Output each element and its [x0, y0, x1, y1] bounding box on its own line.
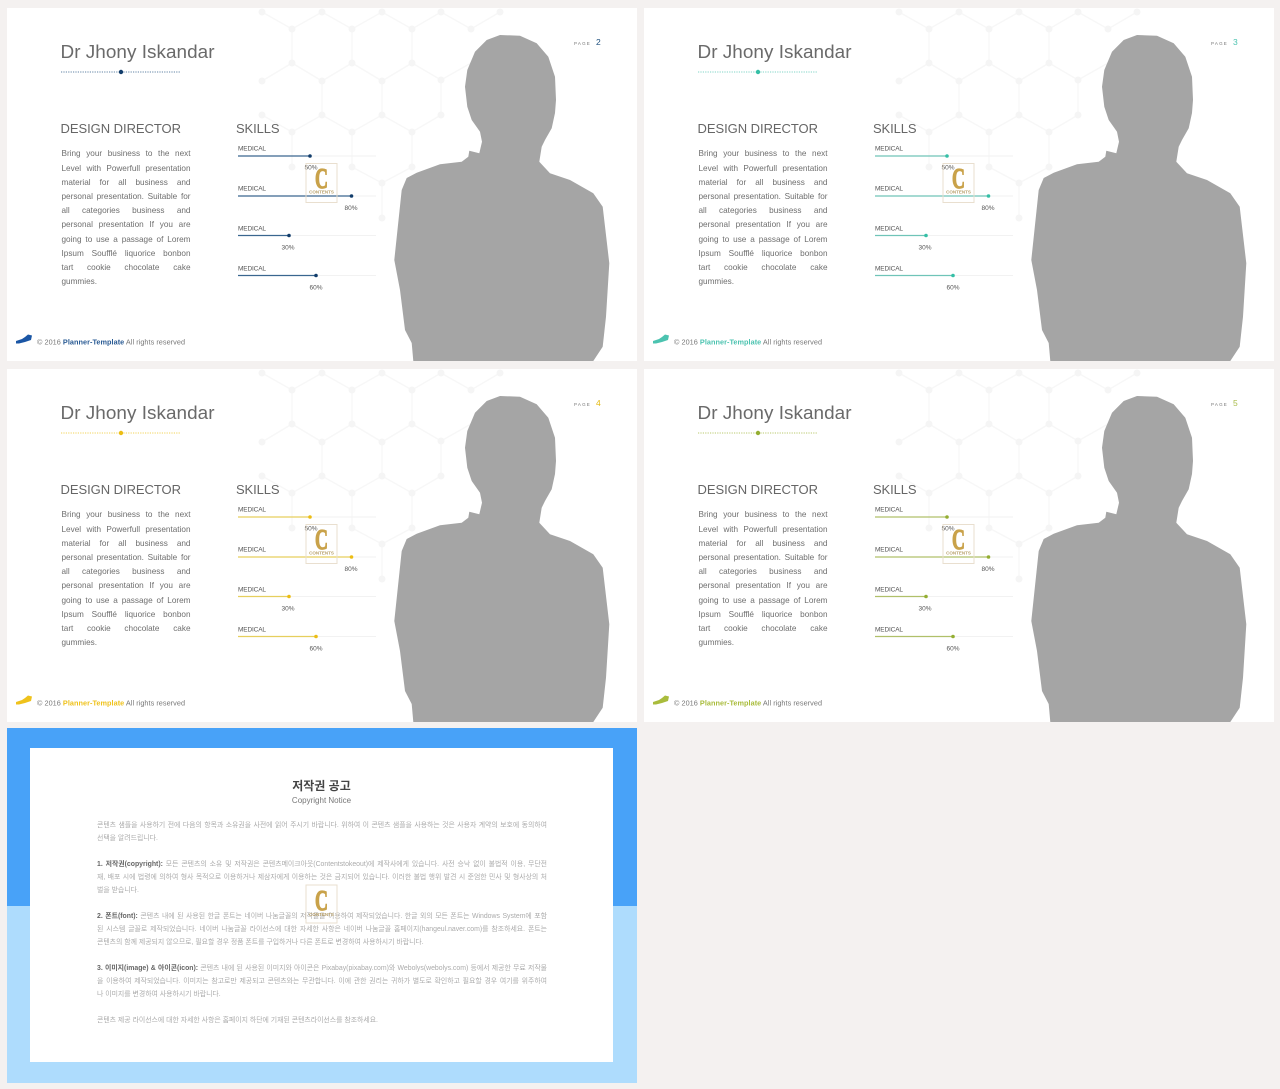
hexagon background pattern — [896, 8, 1140, 222]
body paragraph: Ipsum Soufflé liquorice bonbon — [698, 249, 828, 258]
body paragraph: material for all business and — [62, 539, 190, 548]
page number — [1211, 398, 1238, 408]
body paragraph: personal presentation. Suitable for — [698, 192, 828, 201]
heading: design director: DESIGN DIRECTOR — [60, 121, 181, 136]
skill bar 60%: MEDICAL — [238, 266, 266, 272]
body paragraph: Bring your business to the next — [698, 510, 828, 519]
skill bar 50%: 50% — [304, 526, 318, 532]
body paragraph: Bring your business to the next — [62, 149, 190, 158]
skill bar 30%: MEDICAL — [875, 226, 903, 232]
body paragraph: all categories business and — [62, 567, 190, 576]
panel: slide page 4 yellow — [7, 369, 637, 722]
skill bar 80%: MEDICAL — [238, 186, 266, 192]
icon: shoe logo — [16, 334, 32, 344]
footer copyright: © 2016 Planner-Template All rights reserved — [674, 338, 822, 346]
page number: 4 — [596, 398, 601, 408]
page number — [1211, 37, 1238, 47]
panel: slide page 3 teal — [644, 8, 1274, 361]
skill bar 60%: 60% — [309, 646, 323, 652]
copyright notice text — [97, 821, 547, 1024]
heading: skills: SKILLS — [236, 482, 280, 497]
heading: skills: SKILLS — [873, 482, 917, 497]
body paragraph — [62, 510, 190, 647]
skill bar 80% — [875, 186, 1013, 212]
watermark logo: CONTENTS — [309, 550, 334, 556]
skill bar 50%: MEDICAL — [238, 146, 266, 152]
title: Dr Jhony Iskandar — [60, 42, 214, 63]
skill bar 80%: MEDICAL — [875, 186, 903, 192]
body paragraph: personal presentation. Suitable for — [62, 553, 190, 562]
skill bar 30%: 30% — [918, 244, 932, 252]
body paragraph: Ipsum Soufflé liquorice bonbon — [62, 249, 190, 258]
copyright subheading: Copyright Notice — [292, 796, 351, 805]
watermark logo on notice: CONTENTS — [309, 912, 334, 917]
body paragraph: material for all business and — [698, 539, 828, 548]
skill bar 60%: 60% — [946, 646, 960, 652]
skill bar 50% — [238, 146, 376, 172]
copyright notice text: 을 이용하여 제작되었습니다. 이미지는 참고로만 제공되고 콘텐츠와는 무관합니다. 이에 관한 권리는 귀하가 별도로 확인하고 필요할 경우 여기를 위주하여 — [97, 978, 547, 985]
body paragraph: personal presentation. Suitable for — [698, 553, 828, 562]
body paragraph: Level with Powerfull presentation — [698, 525, 828, 534]
watermark logo on notice — [306, 884, 338, 924]
body paragraph — [698, 149, 828, 286]
copyright notice text: 3. 이미지(image) & 아이콘(icon): 콘텐츠 내에 된 사용된 이미지와 아이콘은 Pixabay(pixabay.com)와 Webolys(webolys.com) 등에서 제공한 무료 저작물 — [97, 965, 547, 972]
skill bar 50%: MEDICAL — [875, 506, 903, 514]
skill bar 30%: 30% — [281, 244, 295, 252]
skill bar 50% — [875, 506, 1013, 532]
watermark logo: CONTENTS — [946, 190, 971, 194]
silhouette portrait — [1031, 396, 1246, 722]
copyright notice text: 2. 폰트(font): 콘텐츠 내에 된 사용된 한글 폰트는 네이버 나눔글꼴의 저작물을 이용하여 제작되었습니다. 한글 외의 모든 폰트는 Windows System에 포함 — [97, 913, 547, 920]
body paragraph: tart cookie chocolate cake — [698, 263, 828, 272]
heading: design director: DESIGN DIRECTOR — [60, 482, 181, 497]
body paragraph: tart cookie chocolate cake — [62, 624, 190, 633]
watermark logo — [306, 164, 337, 202]
body paragraph: Level with Powerfull presentation — [62, 525, 190, 534]
page number — [574, 37, 601, 47]
title divider — [698, 431, 818, 435]
copyright notice text: 나 이미지를 변경하여 사용하시기 바랍니다. — [97, 991, 221, 998]
skill bar 50%: MEDICAL — [238, 506, 266, 514]
skill bar 30%: 30% — [281, 606, 295, 612]
skill bar 50%: 50% — [941, 526, 955, 532]
silhouette portrait — [394, 396, 609, 722]
skill bar 80%: 80% — [344, 566, 358, 573]
skill bar 30% — [875, 586, 1013, 612]
body paragraph: gummies. — [698, 277, 734, 286]
copyright notice text: 재, 배포 시에 법령에 의하여 형사 목적으로 이용하거나 제삼자에게 이용하는 것은 금지되어 있습니다. 이러한 불법 행위 발견 시 준엄한 민사 및 형사상의 처 — [97, 874, 547, 881]
watermark logo: C — [315, 525, 328, 556]
skill bar 60%: 60% — [309, 284, 323, 292]
body paragraph: going to use a passage of Lorem — [698, 235, 828, 244]
body paragraph: personal presentation If you are — [62, 581, 190, 590]
watermark logo — [943, 524, 974, 564]
footer copyright: © 2016 Planner-Template All rights reserved — [37, 338, 185, 346]
skill bar 60%: MEDICAL — [875, 626, 903, 634]
skill bar 30% — [238, 226, 376, 252]
page number: 5 — [1233, 398, 1238, 408]
copyright notice text: 콘텐츠 제공 라이선스에 대한 자세한 사항은 홈페이지 하단에 기재된 콘텐츠라이선스를 참조하세요. — [97, 1017, 378, 1024]
copyright notice text: 콘텐츠 샘플을 사용하기 전에 다음의 항목과 소유권을 사전에 읽어 주시기 바랍니다. 위하여 이 콘텐츠 샘플을 사용하는 것은 사용자 계약의 보호에 동의하여 — [97, 822, 547, 829]
watermark logo on notice: C — [315, 886, 328, 917]
title divider — [61, 431, 181, 435]
watermark logo: C — [952, 525, 965, 556]
skill bar 30% — [875, 226, 1013, 252]
page number: PAGE — [574, 41, 591, 46]
icon: shoe logo — [653, 696, 669, 704]
skill bar 80% — [875, 546, 1013, 573]
skill bar 50% — [238, 506, 376, 532]
body paragraph: personal presentation. Suitable for — [62, 192, 190, 201]
body paragraph: personal presentation If you are — [62, 220, 190, 229]
heading: skills: SKILLS — [873, 121, 917, 136]
skill bar 60%: 60% — [946, 284, 960, 292]
title: Dr Jhony Iskandar — [698, 42, 852, 63]
skill bar 30% — [238, 586, 376, 612]
page number: 2 — [596, 37, 601, 47]
body paragraph: going to use a passage of Lorem — [698, 596, 828, 605]
copyright notice text: 벌을 받습니다. — [97, 887, 139, 894]
body paragraph: all categories business and — [698, 206, 828, 215]
icon: shoe logo — [653, 334, 669, 344]
footer copyright: © 2016 Planner-Template All rights reserved — [674, 698, 822, 708]
skill bar 80%: MEDICAL — [238, 546, 266, 554]
skill bar 60% — [875, 626, 1013, 652]
body paragraph: gummies. — [62, 277, 97, 286]
hexagon background pattern — [896, 370, 1140, 582]
page number: PAGE — [1211, 402, 1228, 407]
body paragraph: Ipsum Soufflé liquorice bonbon — [62, 610, 190, 619]
panel: slide page 5 green — [644, 369, 1274, 722]
title divider — [61, 70, 181, 74]
hexagon background pattern — [258, 370, 504, 582]
skill bar 30%: MEDICAL — [238, 586, 266, 594]
skill bar 80%: MEDICAL — [875, 546, 903, 554]
skill bar 50%: 50% — [941, 164, 955, 172]
body paragraph: material for all business and — [62, 178, 190, 187]
icon: shoe logo — [16, 696, 32, 704]
heading: design director: DESIGN DIRECTOR — [698, 121, 818, 136]
heading: design director: DESIGN DIRECTOR — [698, 482, 818, 497]
hexagon background pattern — [258, 8, 504, 222]
title: Dr Jhony Iskandar — [60, 403, 214, 424]
body paragraph: Level with Powerfull presentation — [698, 164, 828, 173]
watermark logo: CONTENTS — [309, 190, 334, 194]
skill bar 80%: 80% — [981, 205, 995, 212]
skill bar 30%: MEDICAL — [875, 586, 903, 594]
copyright notice text: 선택을 알려드립니다. — [97, 835, 158, 842]
skill bar 60%: MEDICAL — [875, 266, 903, 272]
body paragraph — [698, 510, 828, 647]
watermark logo: CONTENTS — [946, 550, 971, 556]
panel: copyright notice card — [30, 748, 613, 1062]
body paragraph: Level with Powerfull presentation — [62, 164, 190, 173]
heading: skills: SKILLS — [236, 121, 280, 136]
copyright notice text: 콘텐츠의 함께 제공되지 않으므로, 필요할 경우 정품 폰트를 구입하거나 다른 폰트로 변경하여 사용하시기 바랍니다. — [97, 939, 424, 946]
copyright heading: 저작권 공고 — [292, 779, 351, 793]
body paragraph: personal presentation If you are — [698, 220, 828, 229]
skill bar 30%: 30% — [918, 606, 932, 612]
panel: copyright notice backdrop — [7, 728, 637, 1083]
copyright notice text: 1. 저작권(copyright): 모든 콘텐츠의 소유 및 저작권은 콘텐츠메이크아웃(Contentstokeout)에 제작사에게 있습니다. 사전 승낙 없이 불법적 이용, 무단전 — [97, 861, 547, 868]
body paragraph: Bring your business to the next — [698, 149, 828, 158]
skill bar 60% — [238, 626, 376, 652]
skill bar 50%: MEDICAL — [875, 146, 903, 152]
body paragraph: gummies. — [62, 638, 97, 647]
body paragraph: Bring your business to the next — [62, 510, 190, 519]
skill bar 60% — [238, 266, 376, 292]
body paragraph: all categories business and — [62, 206, 190, 215]
skill bar 50%: 50% — [304, 164, 318, 172]
body paragraph: tart cookie chocolate cake — [62, 263, 190, 272]
page number: PAGE — [1211, 41, 1228, 46]
body paragraph: tart cookie chocolate cake — [698, 624, 828, 633]
footer copyright: © 2016 Planner-Template All rights reserved — [37, 698, 185, 708]
body paragraph: personal presentation If you are — [698, 581, 828, 590]
skill bar 50% — [875, 146, 1013, 172]
page number: PAGE — [574, 402, 591, 407]
silhouette portrait — [1031, 35, 1246, 361]
page number — [574, 398, 601, 408]
watermark logo: C — [952, 164, 965, 195]
body paragraph: gummies. — [698, 638, 734, 647]
title: Dr Jhony Iskandar — [698, 403, 852, 424]
body paragraph: Ipsum Soufflé liquorice bonbon — [698, 610, 828, 619]
skill bar 80% — [238, 186, 376, 212]
silhouette portrait — [394, 35, 609, 361]
body paragraph: going to use a passage of Lorem — [62, 596, 190, 605]
skill bar 60%: MEDICAL — [238, 626, 266, 634]
title divider — [698, 70, 818, 74]
panel: slide page 2 navy — [7, 8, 637, 361]
skill bar 80%: 80% — [981, 566, 995, 573]
skill bar 60% — [875, 266, 1013, 292]
body paragraph: all categories business and — [698, 567, 828, 576]
watermark logo — [306, 524, 337, 564]
copyright notice text: 된 시스템 글꼴로 제작되었습니다. 네이버 나눔글꼴 라이선스에 대한 자세한 사항은 네이버 나눔글꼴 홈페이지(hangeul.naver.com)를 참조하세요. 폰트는 — [97, 926, 547, 933]
body paragraph: going to use a passage of Lorem — [62, 235, 190, 244]
skill bar 80%: 80% — [344, 205, 358, 212]
watermark logo — [943, 164, 974, 202]
page number: 3 — [1233, 37, 1238, 47]
body paragraph — [62, 149, 190, 286]
skill bar 80% — [238, 546, 376, 573]
body paragraph: material for all business and — [698, 178, 828, 187]
skill bar 30%: MEDICAL — [238, 226, 266, 232]
watermark logo: C — [315, 164, 328, 195]
